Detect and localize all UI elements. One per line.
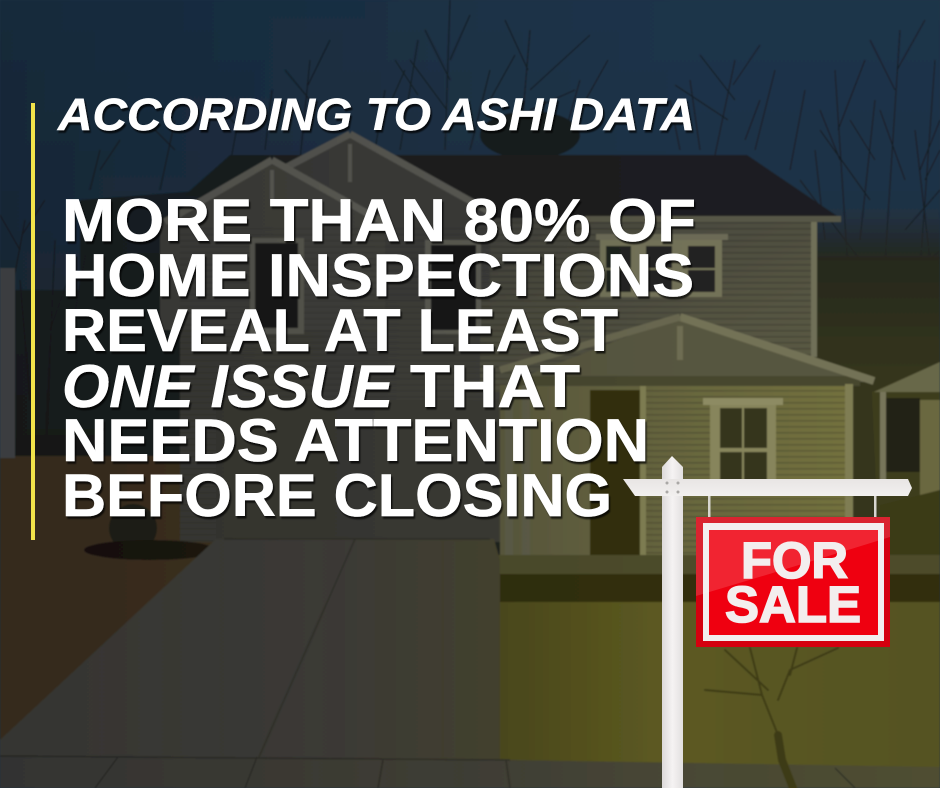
sky [0, 0, 940, 600]
line 2: HOME INSPECTIONS [62, 242, 694, 309]
mulch bed [84, 540, 216, 560]
for sale sign [623, 456, 912, 788]
main statement [62, 187, 696, 529]
porch columns [505, 385, 513, 555]
side porch right [872, 362, 940, 572]
house lower body, left [180, 210, 600, 542]
hanger left [708, 496, 710, 517]
cross arm [623, 479, 912, 496]
left lawn [0, 456, 240, 745]
upper siding right [480, 222, 812, 392]
lap siding on gable [180, 225, 490, 545]
porch window [703, 398, 783, 495]
front bed and bushes [495, 555, 940, 577]
red panel [709, 530, 878, 635]
left shrub [109, 504, 157, 552]
sign text: sale: SALE [725, 576, 861, 633]
shrubs right of sign [880, 490, 940, 580]
main roof [185, 155, 840, 218]
line 4 end: THAT [410, 353, 580, 420]
tree mass right of house [812, 205, 940, 380]
line 6: BEFORE CLOSING [62, 462, 612, 529]
small bare tree on lawn [705, 648, 838, 788]
garage front [216, 400, 506, 542]
porch wall [500, 385, 845, 575]
porch gable [510, 316, 872, 382]
driveway [0, 539, 500, 760]
porch door recess [590, 390, 640, 570]
roof fascia [585, 216, 841, 222]
hanger right [874, 496, 876, 517]
line 1: MORE THAN 80% OF [62, 187, 696, 254]
sign text: for: FOR [741, 532, 848, 589]
tree mass left of house [0, 190, 210, 470]
sidewalk [0, 757, 940, 788]
corner trim [811, 222, 817, 357]
bare trees behind house [0, 0, 940, 470]
gloss highlight [696, 517, 890, 596]
evergreen behind roof [480, 111, 580, 159]
right lawn [495, 602, 940, 769]
white frame [703, 523, 884, 641]
line 3: REVEAL AT LEAST [62, 297, 618, 364]
gable: upper [205, 134, 490, 300]
kicker heading: ACCORDING TO ASHI DATA [57, 89, 695, 140]
line 4 emphasis: ONE ISSUE [62, 353, 395, 420]
red board [696, 517, 890, 647]
neighbouring house on the left [0, 268, 15, 458]
upper windows [250, 234, 728, 334]
gable: lower [160, 160, 385, 330]
post bolts [666, 482, 680, 494]
accent bar [31, 103, 35, 540]
line 5: NEEDS ATTENTION [62, 407, 649, 474]
sign post [662, 456, 683, 788]
